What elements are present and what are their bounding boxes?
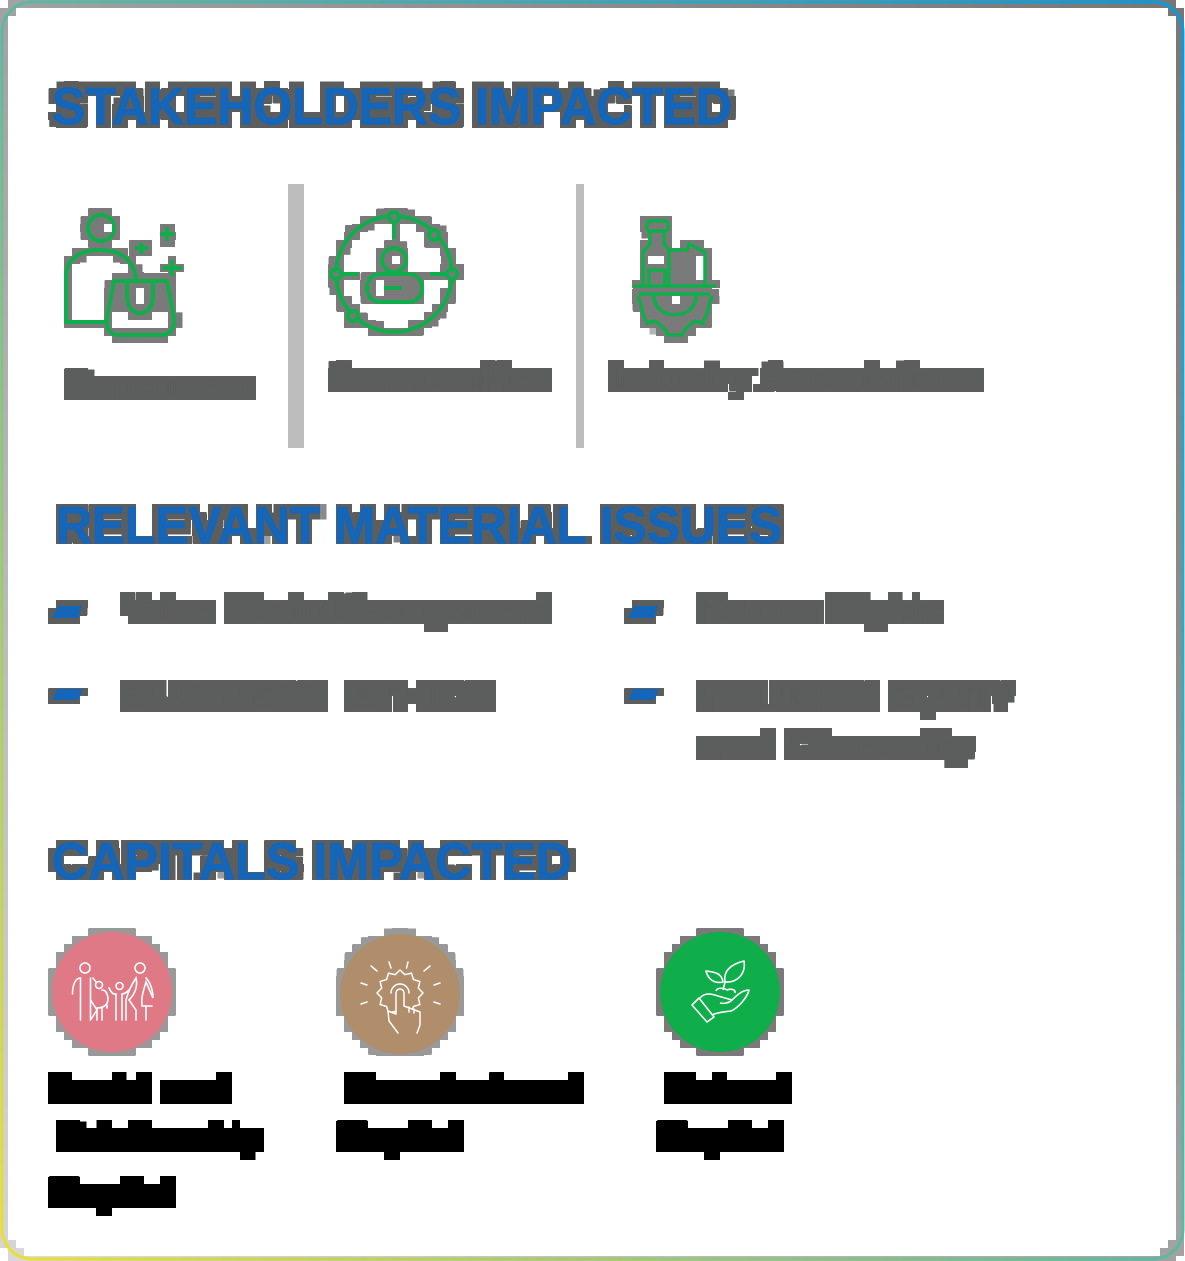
issue: inclusion equity and diversity: INCLUSION (698, 679, 878, 717)
icon: industry associations (633, 221, 716, 335)
icon: manufactured capital (340, 934, 460, 1054)
bullet (52, 689, 83, 700)
bullet (628, 606, 658, 618)
issue: business ethics: BUSINESS (122, 679, 326, 717)
icon: natural capital (660, 932, 780, 1052)
communities label: Communities (330, 360, 550, 398)
issue: inclusion equity and diversity: EQUITY (890, 679, 1014, 717)
heading: capitals impacted: CAPITALS IMPACTED (52, 833, 572, 891)
social capital label: Social (50, 1071, 150, 1109)
icon: consumers (66, 215, 182, 335)
manufactured capital label (338, 1071, 582, 1157)
icon: social and relationship capital (52, 932, 172, 1052)
heading: stakeholders impacted: STAKEHOLDERS IMPACTED (52, 78, 732, 136)
issue: business ethics (122, 679, 494, 717)
issue: business ethics: ETHICS (346, 679, 494, 717)
consumers label: Consumers (66, 367, 254, 405)
natural capital label (658, 1071, 790, 1157)
industry associations label: Industry Associations (610, 360, 982, 398)
issue: value chain management: Value Chain Management (122, 591, 550, 629)
manufactured capital label: Manufactured (346, 1071, 582, 1109)
divider (288, 184, 304, 448)
natural capital label: Capital (658, 1119, 782, 1157)
natural capital label: Natural (666, 1071, 790, 1109)
issue: inclusion equity and diversity (698, 679, 1014, 765)
icon: communities (331, 212, 457, 332)
divider (576, 184, 584, 448)
social capital label: Capital (50, 1175, 174, 1213)
manufactured capital label: Capital (338, 1119, 462, 1157)
social capital label (50, 1071, 262, 1213)
heading: relevant material issues: RELEVANT MATERIAL ISSUES (56, 497, 782, 555)
issue: inclusion equity and diversity: and Diversity (698, 727, 974, 765)
social capital label: Relationship (58, 1119, 262, 1157)
issue: human rights: Human Rights (698, 591, 942, 629)
bullet (628, 689, 659, 700)
social capital label: and (160, 1071, 230, 1109)
bullet (52, 606, 82, 618)
